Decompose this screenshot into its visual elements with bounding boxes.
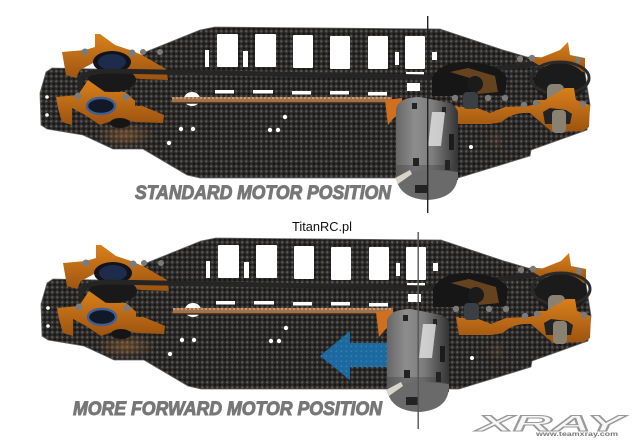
marker line: standard motor position (427, 16, 428, 213)
logo: XRAY: www.teamxray.com (535, 432, 618, 438)
heading: more forward motor position: MORE FORWARD MOTOR POSITION (73, 399, 383, 420)
chassis: forward motor position (41, 238, 591, 389)
motor: forward position (376, 309, 449, 412)
logo: XRAY (472, 411, 629, 438)
motor: standard position (385, 97, 458, 200)
watermark: TitanRC.pl: TitanRC.pl (292, 219, 352, 234)
arrow: forward direction (320, 331, 388, 380)
chassis: standard motor position (40, 27, 590, 178)
heading: standard motor position: STANDARD MOTOR POSITION (135, 183, 392, 204)
marker line: forward motor position (418, 232, 419, 429)
logo: XRAY: XRAY (472, 411, 629, 436)
